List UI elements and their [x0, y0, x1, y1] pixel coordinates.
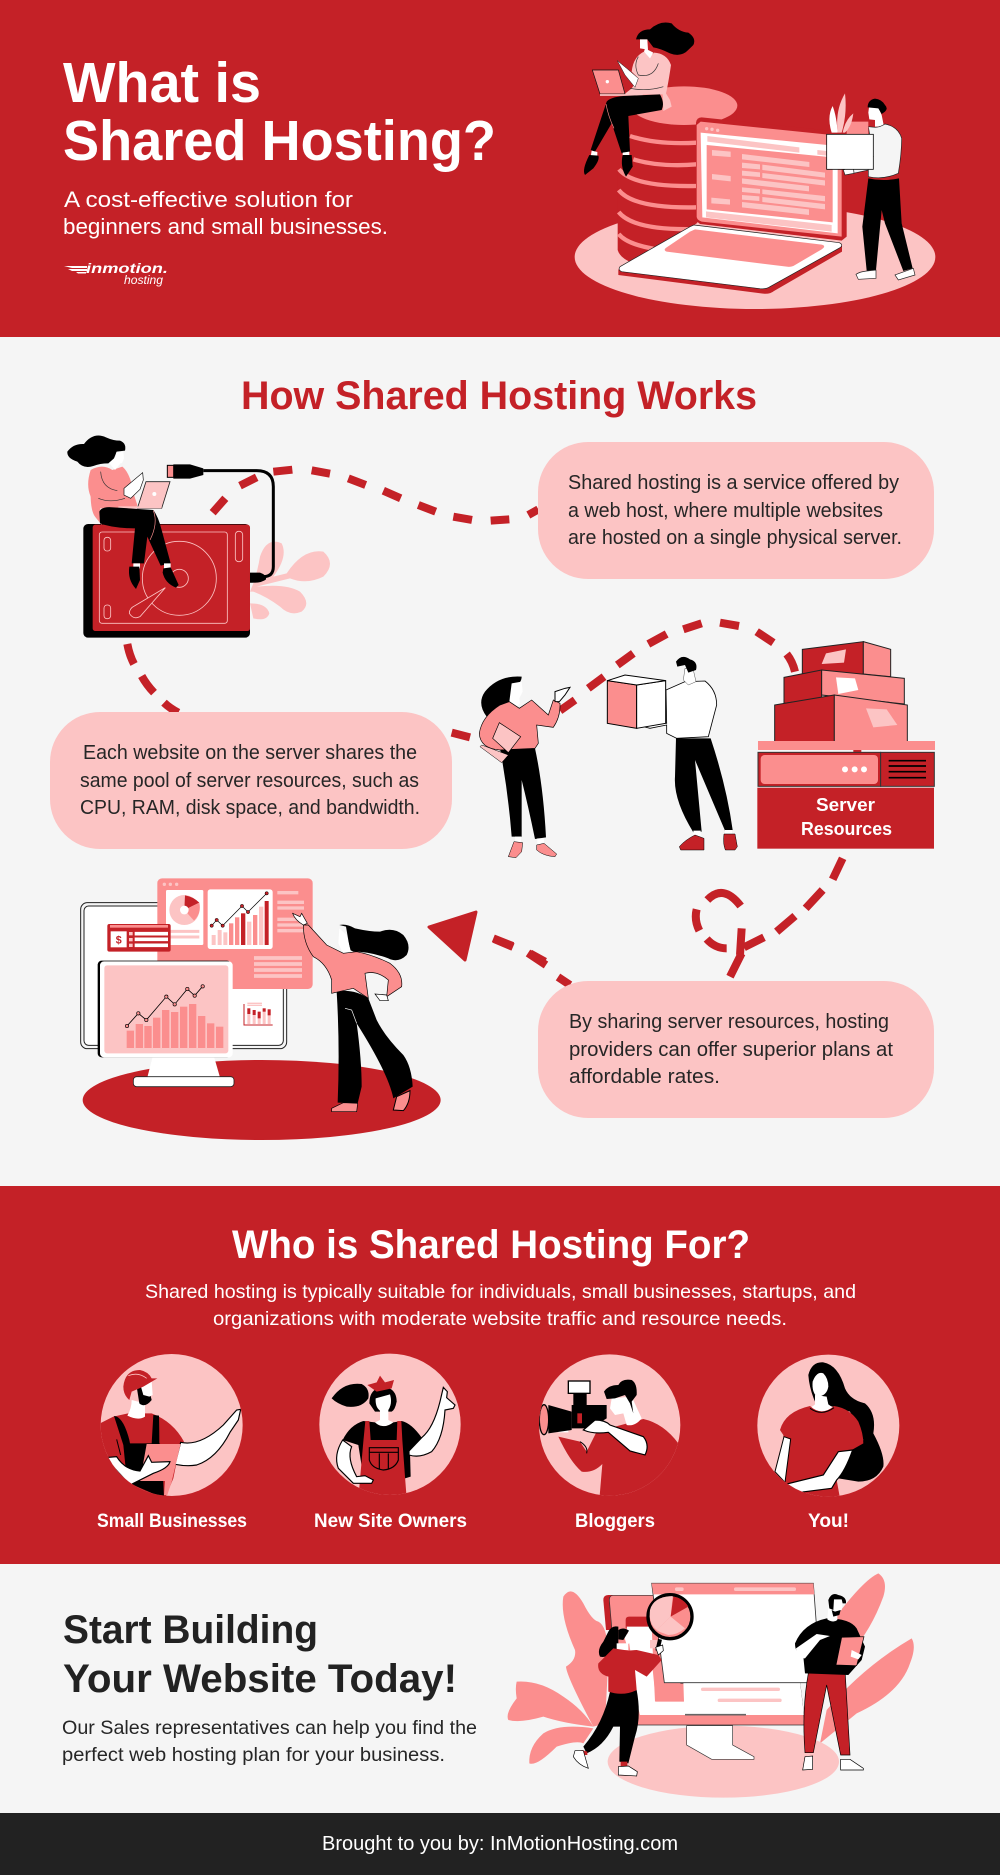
callout: bubble one: Shared hosting is a service offered by: [568, 472, 899, 494]
intro text: [145, 1281, 856, 1330]
logo: InMotion Hosting: inmotion.: [86, 260, 168, 276]
persona labels: Small Businesses: [97, 1511, 247, 1532]
persona labels: You!: [808, 1511, 849, 1532]
icon: hard drive: [83, 524, 250, 638]
icon: you: [755, 1353, 902, 1500]
call to action text: perfect web hosting plan for your business.: [62, 1744, 445, 1766]
heading: Who is Shared Hosting For?: [232, 1223, 750, 1267]
callout: bubble one: are hosted on a single physical server.: [568, 527, 902, 549]
persona labels: Bloggers: [575, 1511, 655, 1532]
icon: back monitor: [81, 903, 287, 1049]
panel: who is shared hosting for: [0, 1186, 1000, 1564]
figure: man carrying box: [607, 657, 737, 850]
callout: bubble one: a web host, where multiple websites: [568, 500, 883, 522]
illustration: woman presenting dashboards: [81, 878, 441, 1140]
heading: How Shared Hosting Works: How Shared Hosting Works: [241, 374, 757, 418]
dashed connector: bubble two to server stack: [452, 623, 843, 977]
intro text: organizations with moderate website traffic and resource needs.: [213, 1308, 787, 1330]
title: Shared Hosting?: [63, 109, 496, 173]
callout: bubble two: CPU, RAM, disk space, and bandwidth.: [80, 797, 420, 819]
figure: presenting woman: [293, 913, 413, 1112]
base ellipse: [608, 1726, 839, 1798]
icon: leaves: [508, 1573, 914, 1764]
footer text: Brought to you by: InMotionHosting.com: [322, 1833, 678, 1855]
icon: USB cable: [167, 464, 273, 583]
heading: start building: Your Website Today!: [63, 1657, 457, 1701]
dashed connector: hard drive to bubble one and bubble two: [127, 470, 538, 713]
panel: server resources label: [757, 788, 934, 849]
icon: dollar card: $: [116, 935, 122, 947]
illustration: woman, man with box, server: [479, 642, 935, 858]
arrow: triangle head: [429, 912, 476, 960]
panel: pink dashboard window: [157, 878, 313, 989]
figure: man with tablet: [795, 1594, 865, 1770]
figure: woman with clipboard: [479, 677, 570, 858]
call to action text: Our Sales representatives can help you find the: [62, 1717, 477, 1739]
panel: footer: [0, 1813, 1000, 1875]
callout: bubble one: [538, 442, 934, 579]
panel: browser window: [652, 1583, 821, 1683]
illustration: website building team: [508, 1573, 914, 1798]
icon: small business worker: [97, 1352, 247, 1498]
figure: seated woman: [67, 436, 179, 589]
platform ellipse: [83, 1060, 441, 1140]
figure: seated woman: [584, 22, 694, 177]
persona icons right: [539, 1354, 900, 1497]
label: Server Resources: Resources: [801, 818, 892, 839]
icon: front monitor with chart: [98, 961, 234, 1087]
figure: woman with magnifier: [573, 1626, 663, 1776]
title: What is: [63, 51, 261, 115]
call to action text: [62, 1717, 477, 1766]
icon: server unit: [758, 741, 935, 786]
icon: monitor: [603, 1595, 805, 1759]
subtitle: [63, 187, 388, 239]
title: [63, 51, 496, 173]
icon: laptop with web page: [618, 117, 847, 294]
icon: database cylinder: [618, 86, 737, 263]
icon: blogger with camera: [539, 1354, 680, 1496]
icon: stacked boxes: [775, 642, 907, 742]
intro text: Shared hosting is typically suitable for individuals, small businesses, startups, and: [145, 1281, 856, 1303]
subtitle: A cost-effective solution for: [64, 187, 353, 212]
callout: bubble three: By sharing server resources, hosting: [569, 1011, 889, 1033]
callout: bubble two: [50, 712, 452, 849]
callout: bubble two: same pool of server resources, such as: [80, 770, 419, 792]
callout: bubble three: providers can offer superior plans at: [569, 1039, 893, 1061]
persona icons left: [97, 1352, 463, 1498]
illustration: hard drive with woman: [67, 436, 330, 638]
icon: splash: [250, 542, 330, 619]
callout: bubble three: [538, 981, 934, 1118]
icon: new site owner: [317, 1352, 463, 1498]
figure: man holding plant box: [827, 93, 915, 280]
logo: InMotion Hosting: hosting: [124, 275, 164, 287]
logo: InMotion Hosting: [64, 260, 168, 287]
heading: start building: Start Building: [63, 1608, 318, 1652]
callout: bubble three: affordable rates.: [569, 1066, 720, 1088]
icon: mini chart: [244, 1003, 273, 1025]
label: Server Resources: [801, 794, 892, 839]
persona labels: [97, 1511, 849, 1532]
icon: dollar card: [107, 924, 171, 952]
icon: magnifier with pie: [648, 1595, 692, 1651]
label: Server Resources: Server: [816, 794, 875, 815]
subtitle: beginners and small businesses.: [63, 214, 388, 239]
illustration: woman on database with laptop and man with plant: [575, 22, 935, 309]
persona labels: New Site Owners: [314, 1511, 467, 1532]
dashed arrow tail: [494, 939, 570, 985]
callout: bubble two: Each website on the server shares the: [83, 742, 417, 764]
panel: hero: [0, 0, 1000, 337]
heading: start building: [63, 1608, 457, 1701]
